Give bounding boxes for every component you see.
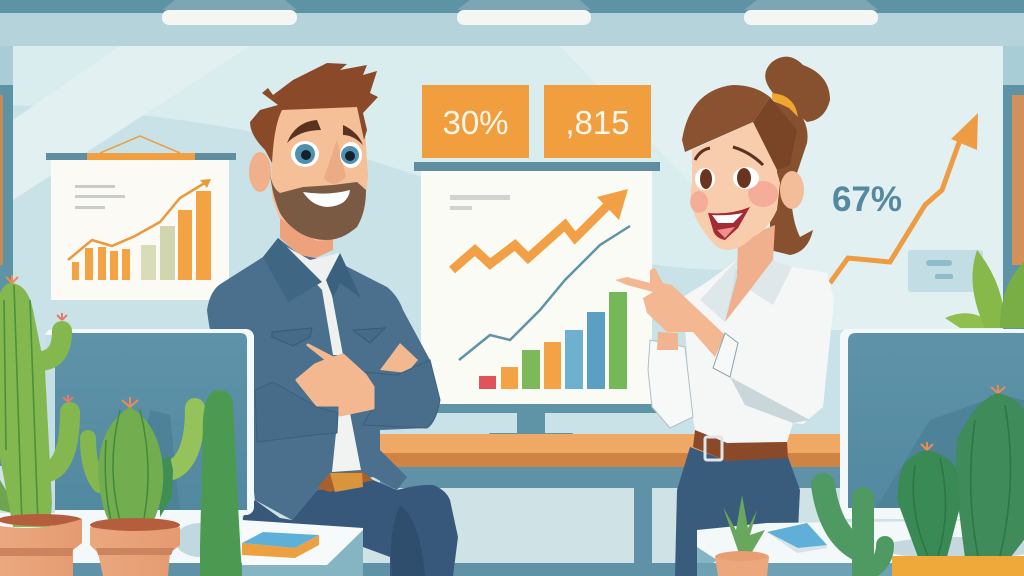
small wall note <box>908 250 983 292</box>
man: hand <box>297 345 373 415</box>
right white desk <box>697 520 1024 576</box>
tall green cactus <box>200 390 242 576</box>
right blue chair panel <box>840 329 1024 519</box>
left blue chair panel <box>45 329 254 515</box>
woman: jeans <box>675 447 800 576</box>
man: beard <box>270 173 366 240</box>
left white desk <box>0 513 363 576</box>
cactus ribs <box>913 405 1010 556</box>
book <box>767 523 827 548</box>
woman: cuff <box>713 333 738 377</box>
woman <box>615 57 834 576</box>
woman: forearm <box>657 332 678 350</box>
icon: orange trend arrow <box>452 205 608 270</box>
right plant <box>945 250 1024 328</box>
small pot plant <box>715 495 769 576</box>
cactus flowers <box>921 385 1005 450</box>
woman: hair front <box>682 85 770 152</box>
man: left collar <box>263 238 322 302</box>
woman: cheeks <box>690 191 708 213</box>
man: belt <box>317 472 373 492</box>
stat card 30%: 30% <box>442 104 509 141</box>
man: face <box>272 107 367 240</box>
man: eyes <box>291 141 319 167</box>
man: hair <box>250 63 378 163</box>
small cactus <box>823 485 885 576</box>
man: right sleeve <box>363 360 440 428</box>
floor strip <box>0 563 1024 576</box>
man: jacket <box>207 238 440 520</box>
woman: blouse <box>683 260 834 443</box>
woman: face <box>691 122 780 250</box>
ceiling lamps <box>162 0 878 25</box>
big pot <box>892 556 1024 576</box>
right growth arrow <box>830 113 978 283</box>
woman: sleeve shading <box>730 377 810 423</box>
woman: neck <box>725 225 775 322</box>
stat card ,815: ,815 <box>565 104 630 141</box>
man: nose <box>324 140 346 184</box>
woman: collar <box>700 260 792 322</box>
man: trousers <box>243 480 458 576</box>
man: mouth <box>303 190 350 207</box>
man <box>207 63 458 576</box>
woman: left sleeve <box>648 340 693 428</box>
man: shirt placket and collar <box>280 243 343 355</box>
woman: eyes <box>695 168 715 190</box>
front cactus <box>897 450 960 557</box>
center chart board <box>414 162 660 443</box>
stat card 30% <box>422 85 529 158</box>
book cover <box>242 532 319 548</box>
woman: scrunchie <box>772 93 798 117</box>
stat card ,815 <box>544 85 651 158</box>
book <box>242 535 319 558</box>
tall cactus pot <box>0 514 82 576</box>
woman: hair back <box>760 100 813 255</box>
man: neck <box>280 217 333 262</box>
woman: mouth <box>708 207 750 240</box>
growth label 67%: 67% <box>832 180 902 219</box>
soil bed <box>882 537 1024 559</box>
round cactus pot <box>90 518 180 576</box>
left wall chart poster <box>46 136 236 300</box>
woman: hand pointing <box>615 268 725 357</box>
man: ear <box>249 152 271 192</box>
tall cactus <box>0 275 73 527</box>
woman: ear <box>780 171 804 209</box>
man: eyebrows <box>287 120 363 145</box>
round cactus <box>88 397 195 528</box>
table <box>380 434 850 568</box>
woman: eyebrows <box>695 147 763 165</box>
man: left sleeve <box>255 382 338 442</box>
woman: bun <box>765 57 830 122</box>
man: pockets <box>272 328 385 346</box>
right plants <box>715 385 1024 576</box>
man: lower shirt <box>332 413 361 472</box>
woman: belt <box>693 430 788 461</box>
man: far hand fingers <box>380 343 418 373</box>
left cacti <box>0 275 242 576</box>
man: right collar <box>326 253 361 298</box>
back cactus <box>955 393 1024 558</box>
woman: side hair <box>753 97 797 170</box>
